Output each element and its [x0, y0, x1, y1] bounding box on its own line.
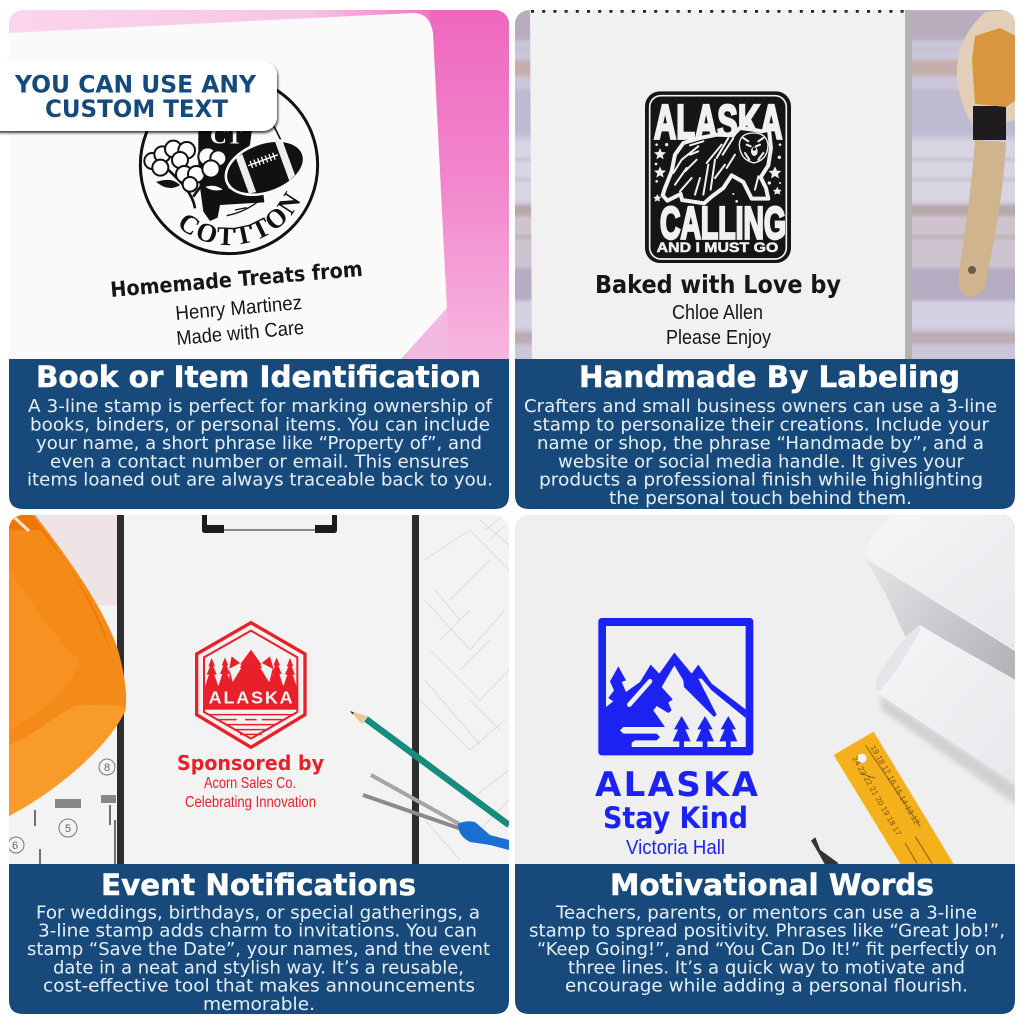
caption box: motivational words: encourage while adding a personal flourish.	[565, 976, 968, 997]
caption box: event notifications: memorable.	[203, 994, 315, 1015]
panel: motivational words	[515, 514, 1019, 1014]
caption box: book or item identification: even a contact number or email. This ensures	[50, 451, 469, 472]
stamp text: alaska stay kind: Stay Kind	[603, 801, 748, 835]
caption box: handmade by labeling: the personal touch behind them.	[609, 488, 912, 509]
stars	[653, 143, 782, 203]
icon: compass	[363, 775, 509, 850]
stamp: alaska calling bear badge: CALLING	[660, 198, 786, 249]
caption box: event notifications	[9, 864, 509, 1015]
panel: handmade by labeling	[510, 10, 1020, 509]
icon: upper paper roll	[980, 515, 1015, 536]
caption box: motivational words: Teachers, parents, or mentors can use a 3-line	[555, 902, 977, 923]
notepad perforation dots	[531, 10, 904, 13]
stamp text: baked with love: Chloe Allen	[672, 302, 763, 324]
stamp text: alaska stay kind: Victoria Hall	[626, 836, 725, 859]
caption box: handmade by labeling: website or social media handle. It gives your	[558, 451, 965, 472]
stamp: alaska calling bear badge	[645, 91, 791, 263]
caption box: motivational words: “Keep Going!”, and “You Can Do It!” fit perfectly on	[537, 939, 997, 960]
caption box: book or item identification: A 3-line stamp is perfect for marking ownership of	[28, 396, 493, 417]
caption box: book or item identification	[9, 359, 509, 509]
stamp: cotton and football round logo	[138, 88, 320, 256]
caption box: motivational words: stamp to spread positivity. Phrases like “Great Job!”,	[529, 921, 1005, 942]
stamp text: baked with love	[595, 270, 841, 349]
stamp: alaska red hexagon	[197, 623, 305, 747]
stamp text: sponsored by: Acorn Sales Co.	[204, 775, 296, 792]
caption box: handmade by labeling: name or shop, the phrase “Handmade by”, and a	[537, 433, 984, 454]
stamp text: sponsored by: Celebrating Innovation	[185, 794, 316, 811]
stamp text: alaska stay kind: ALASKA	[595, 765, 759, 805]
caption box: event notifications: For weddings, birthdays, or special gatherings, a	[36, 902, 480, 923]
icon: orange hard hat	[9, 515, 126, 816]
caption box: handmade by labeling: products a professional finish while highlighting	[539, 470, 983, 491]
icon: black pen tip	[811, 837, 838, 864]
caption box: event notifications: Event Notifications	[101, 868, 416, 902]
icon: yellow ruler	[834, 732, 955, 867]
caption box: book or item identification: books, binders, or personal items. You can include	[30, 414, 490, 436]
caption box: handmade by labeling	[515, 359, 1015, 509]
caption box: motivational words	[515, 864, 1015, 1014]
caption box: event notifications: cost-effective tool that makes announcements	[43, 976, 475, 997]
stamp text: homemade treats: Homemade Treats from	[109, 257, 364, 302]
stamp text: sponsored by: Sponsored by	[177, 751, 324, 775]
caption box: handmade by labeling: stamp to personalize their creations. Include your	[533, 414, 990, 436]
photo: clipboard, hard hat and blueprints: 5	[65, 823, 71, 835]
icon: pencil	[350, 711, 509, 825]
photo: notepad on wood with brush	[510, 10, 1020, 380]
stamp: alaska calling bear badge: ALASKA	[654, 96, 782, 150]
caption box: handmade by labeling: Crafters and small business owners can use a 3-line	[524, 396, 997, 417]
caption box: book or item identification: Book or Item Identification	[36, 360, 481, 394]
stamp: alaska red hexagon: ALASKA	[209, 688, 293, 708]
icon: cotton branch	[144, 141, 226, 208]
stamp text: baked with love: Baked with Love by	[595, 270, 841, 299]
icon: yellow ruler: 24 23 22 21 20 19 18 17	[850, 755, 903, 838]
stamp: cotton and football round logo: COTTTON	[180, 190, 300, 246]
stamp text: homemade treats	[112, 264, 362, 345]
caption box: book or item identification: items loaned out are always traceable back to you.	[27, 470, 493, 491]
blueprint linework	[420, 518, 509, 860]
stamp text: sponsored by	[177, 751, 324, 811]
caption box: book or item identification: your name, a short phrase like “Property of”, and	[36, 433, 482, 454]
badge: you can use any custom text: YOU CAN USE ANY	[14, 70, 257, 98]
icon: lower paper roll	[876, 625, 1019, 786]
caption box: event notifications: stamp “Save the Date”, your names, and the event	[27, 939, 490, 960]
stamp text: alaska stay kind	[595, 770, 758, 854]
panel: book or item identification	[9, 10, 509, 509]
stamp text: homemade treats: Henry Martinez	[175, 292, 303, 325]
caption box: motivational words: three lines. It’s a quick way to motivate and	[568, 957, 965, 978]
stamp text: baked with love: Please Enjoy	[666, 327, 771, 349]
clipboard	[117, 515, 419, 885]
icon: pastry brush	[957, 10, 1018, 297]
icon: football	[224, 139, 303, 196]
photo: clipboard, hard hat and blueprints	[8, 515, 509, 885]
badge: you can use any custom text	[0, 61, 277, 131]
caption box: event notifications: 3-line stamp adds charm to invitations. You can	[38, 921, 477, 942]
photo: clipboard, hard hat and blueprints: 6	[12, 840, 18, 852]
photo: stamped white card on pink	[9, 10, 509, 359]
panel: event notifications	[8, 515, 509, 1015]
photo: clipboard, hard hat and blueprints: 8	[104, 762, 110, 774]
stamp: blue mountain badge	[598, 618, 753, 755]
badge: you can use any custom text: CUSTOM TEXT	[45, 95, 229, 123]
caption box: motivational words: Motivational Words	[610, 868, 934, 902]
stamp: cotton and football round logo: CT	[210, 123, 243, 149]
stamp text: homemade treats: Made with Care	[176, 317, 305, 350]
caption box: handmade by labeling: Handmade By Labeling	[579, 360, 960, 394]
icon: bear	[663, 128, 771, 203]
photo: desk with paper rolls and ruler	[515, 514, 1019, 885]
stamp: alaska calling bear badge: AND I MUST GO	[657, 239, 778, 255]
icon: yellow ruler: 19 18 17 16 15 14 13 12	[869, 744, 922, 827]
caption box: event notifications: date in a neat and stylish way. It’s a reusable,	[53, 957, 464, 978]
